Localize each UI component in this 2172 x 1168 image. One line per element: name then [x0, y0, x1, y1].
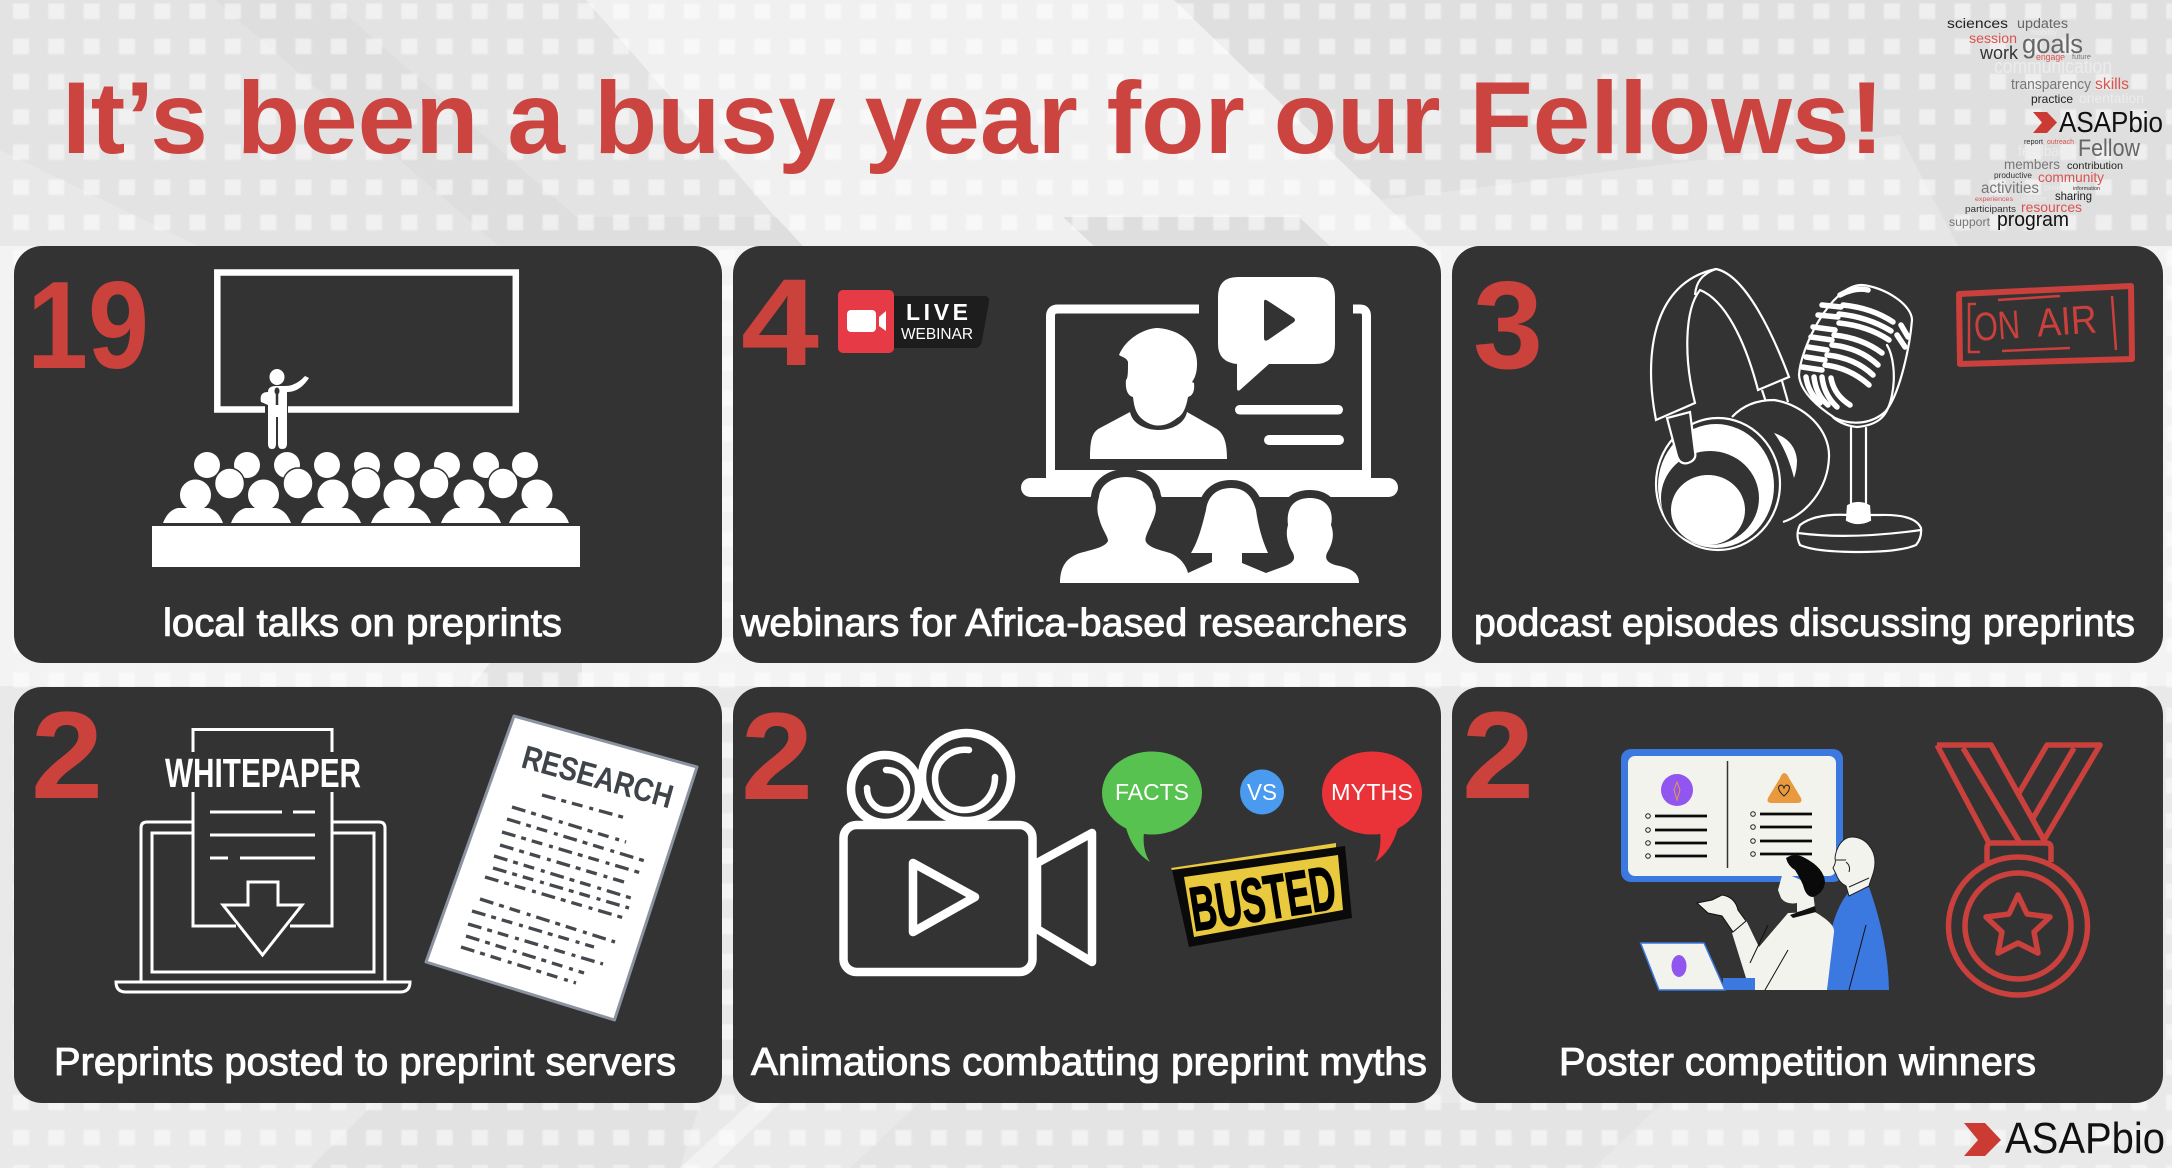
icon: webinar screen [1021, 277, 1398, 497]
icon: video camera [844, 733, 1092, 972]
word cloud logo: members [2004, 156, 2060, 172]
icon: whitepaper laptop: WHITEPAPER [165, 750, 361, 796]
icon: audience [163, 452, 569, 523]
icon: research paper [426, 716, 697, 1020]
word cloud logo: communication [1994, 56, 2112, 78]
word cloud logo: program [1997, 209, 2069, 231]
panel: animations [733, 687, 1441, 1103]
icon: vs badge: VS [1247, 779, 1277, 805]
caption: local talks on preprints [163, 602, 562, 645]
word cloud logo: support [1949, 217, 1991, 229]
icon: live webinar badge [838, 290, 989, 353]
caption: Animations combatting preprint myths [751, 1041, 1427, 1084]
panel: webinars [733, 246, 1441, 663]
word cloud logo: productive [1994, 170, 2032, 180]
panel: preprints [14, 687, 722, 1103]
caption: Poster competition winners [1559, 1041, 2036, 1084]
word cloud logo: activities [1981, 180, 2039, 197]
icon: medal [1937, 745, 2100, 995]
word cloud logo: engage [2036, 52, 2065, 62]
word cloud logo: sharing [2055, 189, 2092, 203]
number: 2: 2 [1462, 687, 1534, 825]
word cloud logo: information [2073, 186, 2100, 192]
icon: whitepaper laptop [116, 730, 410, 992]
word cloud logo: Fellow [2078, 135, 2141, 162]
icon: laptop [1641, 943, 1755, 990]
word cloud logo: transparency [2011, 77, 2092, 93]
icon: presentation screen [217, 272, 516, 410]
word cloud logo: community [2038, 169, 2104, 185]
icon: webinar viewers [1060, 477, 1359, 583]
icon: vs badge [1240, 770, 1284, 814]
word cloud logo: session [1969, 30, 2017, 46]
icon: audience table [152, 526, 580, 567]
title: It’s been a busy year for our Fellows! [62, 61, 1884, 175]
word cloud logo: sciences [1947, 16, 2008, 31]
icon: live webinar badge: WEBINAR [901, 326, 973, 343]
icon: live webinar badge: LIVE [906, 299, 968, 325]
number: 2: 2 [741, 688, 813, 826]
icon: speaker [261, 369, 309, 449]
panel: poster competition [1452, 687, 2163, 1103]
word cloud logo: contribution [2067, 160, 2123, 172]
word cloud logo: practice [2031, 92, 2073, 106]
word cloud logo: goals [2022, 29, 2083, 59]
icon: facts bubble [1102, 752, 1202, 862]
word cloud logo: report [2024, 139, 2043, 146]
number: 2: 2 [31, 687, 103, 825]
word cloud logo [1947, 16, 2163, 231]
word cloud logo: initiative [2022, 196, 2047, 203]
number: 19: 19 [27, 257, 149, 395]
word cloud logo: resources [2021, 199, 2082, 215]
caption: Preprints posted to preprint servers [54, 1041, 676, 1084]
icon: headphones [1651, 269, 1829, 550]
icon: on air stamp [1959, 286, 2132, 364]
icon: busted sign: BUSTED [1185, 854, 1340, 945]
icon: on air stamp: ON [1973, 303, 2022, 350]
caption: webinars for Africa-based researchers [740, 602, 1407, 645]
number: 4: 4 [741, 254, 819, 392]
icon: microphone [1798, 285, 1921, 552]
word cloud logo: project [2044, 183, 2071, 192]
icon: poster board [1621, 749, 1843, 882]
word cloud logo: skills [2095, 76, 2129, 93]
icon: on air stamp: AIR [2035, 298, 2098, 346]
icon: facts bubble: FACTS [1115, 779, 1189, 805]
icon: myths bubble: MYTHS [1331, 779, 1413, 805]
panel: local talks [14, 246, 722, 663]
word cloud logo: experiences [1975, 196, 2014, 203]
word cloud logo: ASAPbio [2059, 107, 2163, 139]
word cloud logo: future [2072, 52, 2091, 61]
word cloud logo: participants [1965, 204, 2016, 215]
word cloud logo: work [1979, 43, 2019, 63]
word cloud logo: feedback [2018, 143, 2072, 160]
icon: research paper: RESEARCH [518, 738, 677, 815]
caption: podcast episodes discussing preprints [1474, 602, 2135, 645]
number: 3: 3 [1473, 257, 1543, 395]
icon: busted sign [1171, 843, 1352, 947]
icon: myths bubble [1322, 752, 1422, 862]
word cloud logo: outreach [2047, 139, 2074, 146]
panel: podcast [1452, 246, 2163, 663]
word cloud logo: updates [2017, 16, 2068, 31]
word cloud logo: orientation [2079, 90, 2144, 106]
word cloud logo: mobility [2031, 28, 2057, 37]
icon: two people viewing the poster [1697, 837, 1889, 990]
